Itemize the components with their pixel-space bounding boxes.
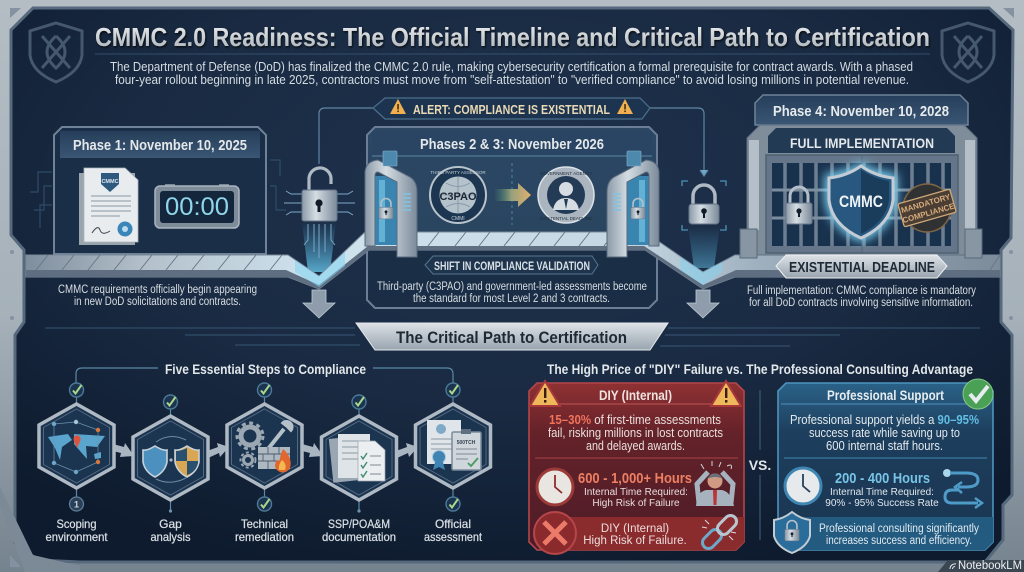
icon: red X [534,512,576,554]
professional body text: Professional support yields a 90–95% [790,413,979,427]
phase 4 caption: Full implementation: CMMC compliance is mandatory [747,285,976,297]
NotebookLM watermark: NotebookLM [958,560,1022,572]
step label: Gap [159,517,182,531]
icon: C3PAO seal: THIRD PARTY ASSESSOR [430,170,486,175]
phase 1 caption: in new DoD solicitations and contracts. [74,296,241,308]
DIY body text: fail, risking millions in lost contracts [548,426,723,440]
phase 2 caption: the standard for most Level 2 and 3 contracts. [413,293,610,305]
shift banner: SHIFT IN COMPLIANCE VALIDATION [434,261,590,273]
panel: DIY internal: DIY (Internal) [599,388,672,403]
step 3: technical remediation [227,383,302,544]
existential deadline banner [776,255,947,278]
DIY hours: 600 - 1,000+ Hours [578,470,692,487]
icon: blue clock [785,468,821,504]
icon: red clock [537,469,573,505]
DIY body text [548,413,723,453]
arrow: down at first lock [303,290,335,318]
process arrows [113,443,418,458]
step label: Scoping [56,517,96,531]
professional bottom text [819,523,979,547]
DIY hours detail [584,487,688,509]
phase 4 header: Phase 4: November 10, 2028 [773,103,949,120]
professional body text [790,413,979,453]
professional body text: 600 internal staff hours. [826,439,943,453]
icon: route arrows [943,469,982,508]
professional bottom text: Professional consulting significantly [819,523,979,535]
intro text: The Department of Defense (DoD) has finalized the CMMC 2.0 rule, making cybersecurity certification a formal prerequisite for contract awards. With a phased [110,60,913,74]
icon: government assessor seal: GOVERNMENT AGENCY [540,171,592,176]
DIY body text: 15–30% of first-time assessments [549,413,721,427]
DIY body text: and delayed awards. [586,439,685,453]
icon: C3PAO seal [430,167,486,223]
intro text: four-year rollout beginning in late 2025, contractors must move from "self-attestation" to "verified compliance" to avoid losing millions in potential revenue. [115,73,909,87]
phase 4 caption: for all DoD contracts involving sensitive information. [749,297,973,309]
icon: stressed person [696,461,734,506]
step label: remediation [235,530,294,544]
icon: broken chain [700,513,739,551]
unlocked padlock with circuit [284,168,355,272]
title: CMMC 2.0 Readiness: The Official Timeline and Critical Path to Certification [95,22,930,52]
DIY hours detail: High Risk of Failure [592,498,680,509]
title underline [95,53,930,55]
professional body text: success rate while saving up to [809,426,960,440]
intro text [110,60,913,87]
VS divider: VS. [749,457,771,473]
icon: digital clock: 00:00 [165,193,229,221]
step label [150,517,190,544]
icon: gears wrench firewall [237,421,293,472]
icon: world map [48,420,105,474]
icon: government assessor seal [538,167,594,223]
panel: phase 1 [54,127,266,254]
panel: phase 1: Phase 1: November 10, 2025 [73,137,247,154]
professional bottom text: increases success and efficiency. [826,535,972,547]
arrow: C3PAO to government [495,183,531,207]
critical path banner: The Critical Path to Certification [396,328,627,347]
icon: certificate document: CMMC [101,179,119,185]
panel: phases 2 and 3 [367,127,657,308]
icon: C3PAO seal: C3PAO [439,191,477,203]
full implementation banner: FULL IMPLEMENTATION [790,135,934,151]
icon: certificate and clipboard: 500TCH [457,440,476,446]
mandatory compliance stamp: MANDATORY [900,192,952,215]
shift banner [425,256,598,274]
step 2: gap analysis [133,395,208,544]
panel: professional support: Professional Support [827,388,944,403]
step label [322,517,396,544]
step label [235,517,294,544]
step label: Technical [241,517,288,531]
phase 2 caption [377,281,647,305]
mandatory compliance stamp: COMPLIANCE [901,201,956,225]
icon: certificate document [79,168,138,245]
faint circuit traces [30,160,286,228]
icon: warning triangles [530,381,741,406]
icon: lock shield [774,512,810,553]
icon: digital clock [155,184,239,228]
phase 4 header [755,95,968,125]
corner shields [30,23,994,82]
step label: analysis [150,530,190,544]
step label: Official [435,517,471,531]
full implementation banner [768,128,955,153]
step label: SSP/POA&M [328,517,390,531]
locked padlock [682,181,726,268]
CMMC shield: CMMC [839,192,883,211]
professional hours: 200 - 400 Hours [835,470,930,487]
step label: environment [46,530,108,544]
vault gate [740,125,982,258]
step number [70,497,84,511]
panel: DIY internal [529,381,744,554]
CMMC shield [825,162,897,242]
icon: certificate and clipboard [427,420,481,470]
right gate [607,151,659,257]
icon: green check [963,379,993,409]
phase 2 caption: Third-party (C3PAO) and government-led assessments become [377,281,647,293]
phase 4 caption [747,285,976,309]
step 5: official assessment [416,383,490,544]
professional bottom bar [795,517,993,550]
professional hours detail: 90% - 95% Success Rate [825,498,939,509]
step label [424,517,483,544]
step label [46,517,108,544]
alert banner: ALERT: COMPLIANCE IS EXISTENTIAL [413,102,610,117]
step label: documentation [322,530,396,544]
phase 1 caption: CMMC requirements officially begin appearing [58,284,257,296]
DIY hours detail: Internal Time Required: [584,487,688,498]
DIY bottom text: DIY (Internal) [601,523,669,535]
icon: government assessor seal: EXISTENTIAL DEADLINE [540,216,592,221]
left gate [365,151,417,257]
heading: five essential steps: Five Essential Steps to Compliance [165,361,366,377]
icon: C3PAO seal: CMMI [451,216,465,222]
step 4: documentation [322,395,396,544]
icon: shields [143,436,199,482]
step label: assessment [424,530,483,544]
heading: five essential steps [76,361,453,383]
critical path banner [45,323,980,350]
timeline road [26,232,1000,289]
alert banner [373,98,650,119]
phase 1 caption [58,284,257,308]
vault padlock [786,187,812,224]
panel: phases 2 and 3: Phases 2 & 3: November 2026 [420,136,604,153]
professional hours detail: Internal Time Required: [830,487,934,498]
professional hours detail [825,487,939,509]
panel: professional support [774,379,993,553]
icon: documents [329,434,385,483]
DIY bottom text [583,523,687,547]
step number: 1 [74,500,79,510]
DIY bottom text: High Risk of Failure. [583,535,687,547]
step 1: scoping [39,383,114,544]
panel: phase 4 [740,95,982,258]
existential deadline banner: EXISTENTIAL DEADLINE [789,259,935,276]
mandatory compliance stamp [894,177,960,239]
arrow: down at second lock [687,290,719,318]
alert connectors [319,108,708,176]
DIY bottom bar [570,517,744,550]
